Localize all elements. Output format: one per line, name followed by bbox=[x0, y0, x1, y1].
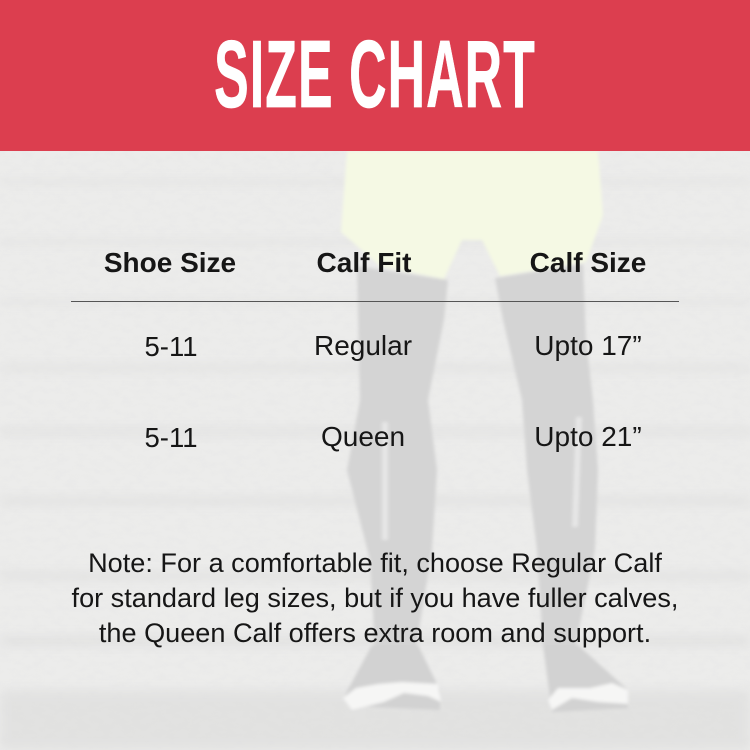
right leg bbox=[495, 264, 598, 648]
table bbox=[71, 247, 679, 453]
note: the Queen Calf offers extra room and support. bbox=[99, 617, 651, 648]
note: for standard leg sizes, but if you have fuller calves, bbox=[72, 582, 678, 613]
row 1 calf fit: Regular bbox=[314, 330, 412, 361]
row 2 calf fit: Queen bbox=[321, 421, 405, 452]
column heading: calf size: Calf Size bbox=[530, 247, 646, 278]
sock reflective strips bbox=[382, 422, 388, 540]
shorts bbox=[341, 151, 603, 279]
shoes bbox=[345, 645, 440, 710]
row 2 shoe size: 5-11 bbox=[144, 422, 198, 453]
column heading: calf fit: Calf Fit bbox=[317, 247, 411, 278]
note bbox=[72, 547, 678, 648]
title banner bbox=[0, 0, 750, 151]
row 1 calf size: Upto 17” bbox=[534, 330, 642, 361]
row 2 calf size: Upto 21” bbox=[534, 421, 642, 452]
left leg bbox=[347, 266, 448, 648]
note: Note: For a comfortable fit, choose Regular Calf bbox=[88, 547, 662, 578]
title: SIZE CHART bbox=[214, 21, 536, 128]
row 1 shoe size: 5-11 bbox=[144, 331, 198, 362]
column heading: shoe size: Shoe Size bbox=[104, 247, 236, 278]
